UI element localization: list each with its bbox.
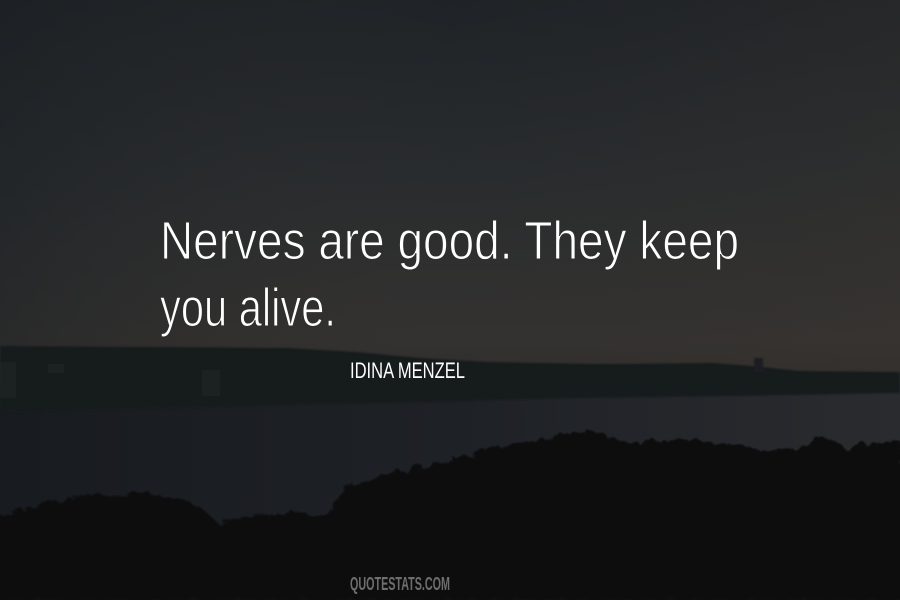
quote text: Nerves are good. They keep (160, 211, 739, 271)
background: distant shoreline (0, 346, 900, 413)
background: water (0, 385, 900, 545)
quote text: you alive. (160, 278, 336, 338)
background: evening sky (0, 0, 900, 400)
quote text (160, 211, 739, 338)
author name: IDINA MENZEL (350, 358, 465, 383)
source credit: QUOTESTATS.COM (350, 574, 450, 594)
background: foreground trees (0, 430, 900, 600)
